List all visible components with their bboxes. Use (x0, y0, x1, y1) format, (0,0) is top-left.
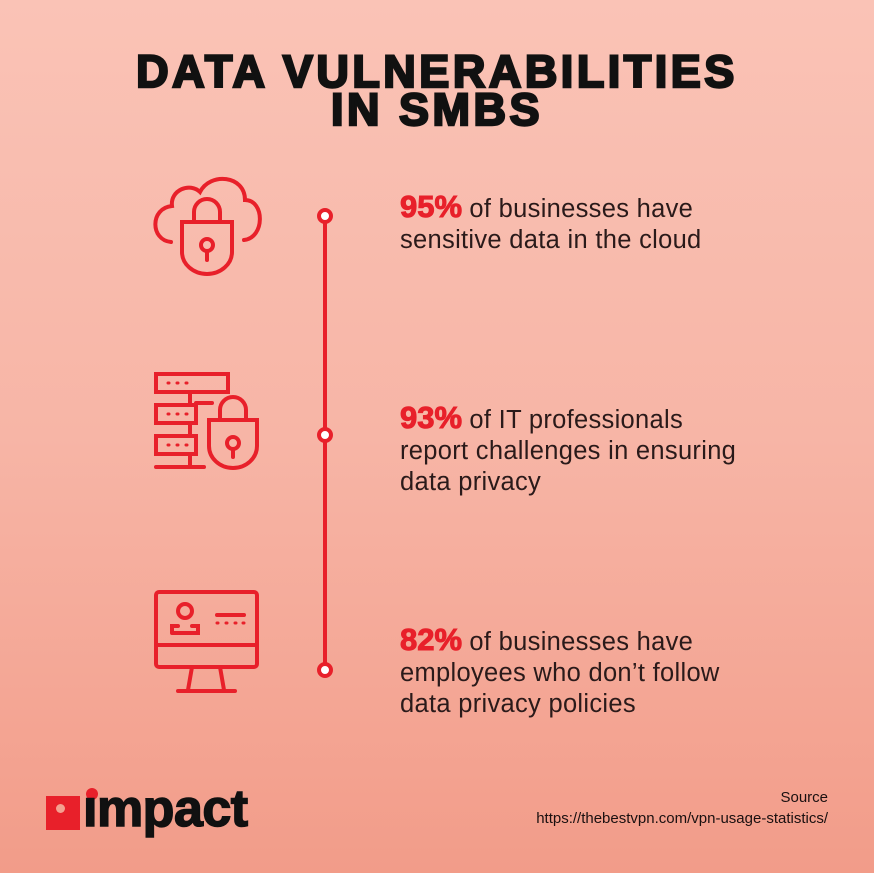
title (136, 46, 738, 135)
stat 3 (400, 622, 720, 718)
stat 1: 95% of businesses have (400, 189, 693, 224)
source (536, 789, 828, 827)
title: IN SMBS (331, 84, 543, 135)
stat 3: employees who don’t follow (400, 659, 720, 687)
stat 2: data privacy (400, 468, 541, 496)
stat 2: report challenges in ensuring (400, 437, 736, 465)
stat 1 (400, 189, 702, 254)
logo: impact: ımpact (83, 780, 248, 838)
title: DATA VULNERABILITIES (136, 46, 738, 97)
stat 3: data privacy policies (400, 690, 636, 718)
source: Source (780, 789, 828, 806)
source: https://thebestvpn.com/vpn-usage-statistics/ (536, 810, 828, 827)
stat 2: 93% of IT professionals (400, 400, 683, 435)
stat 3: 82% of businesses have (400, 622, 693, 657)
stat 2 (400, 400, 736, 496)
stat 1: sensitive data in the cloud (400, 226, 702, 254)
